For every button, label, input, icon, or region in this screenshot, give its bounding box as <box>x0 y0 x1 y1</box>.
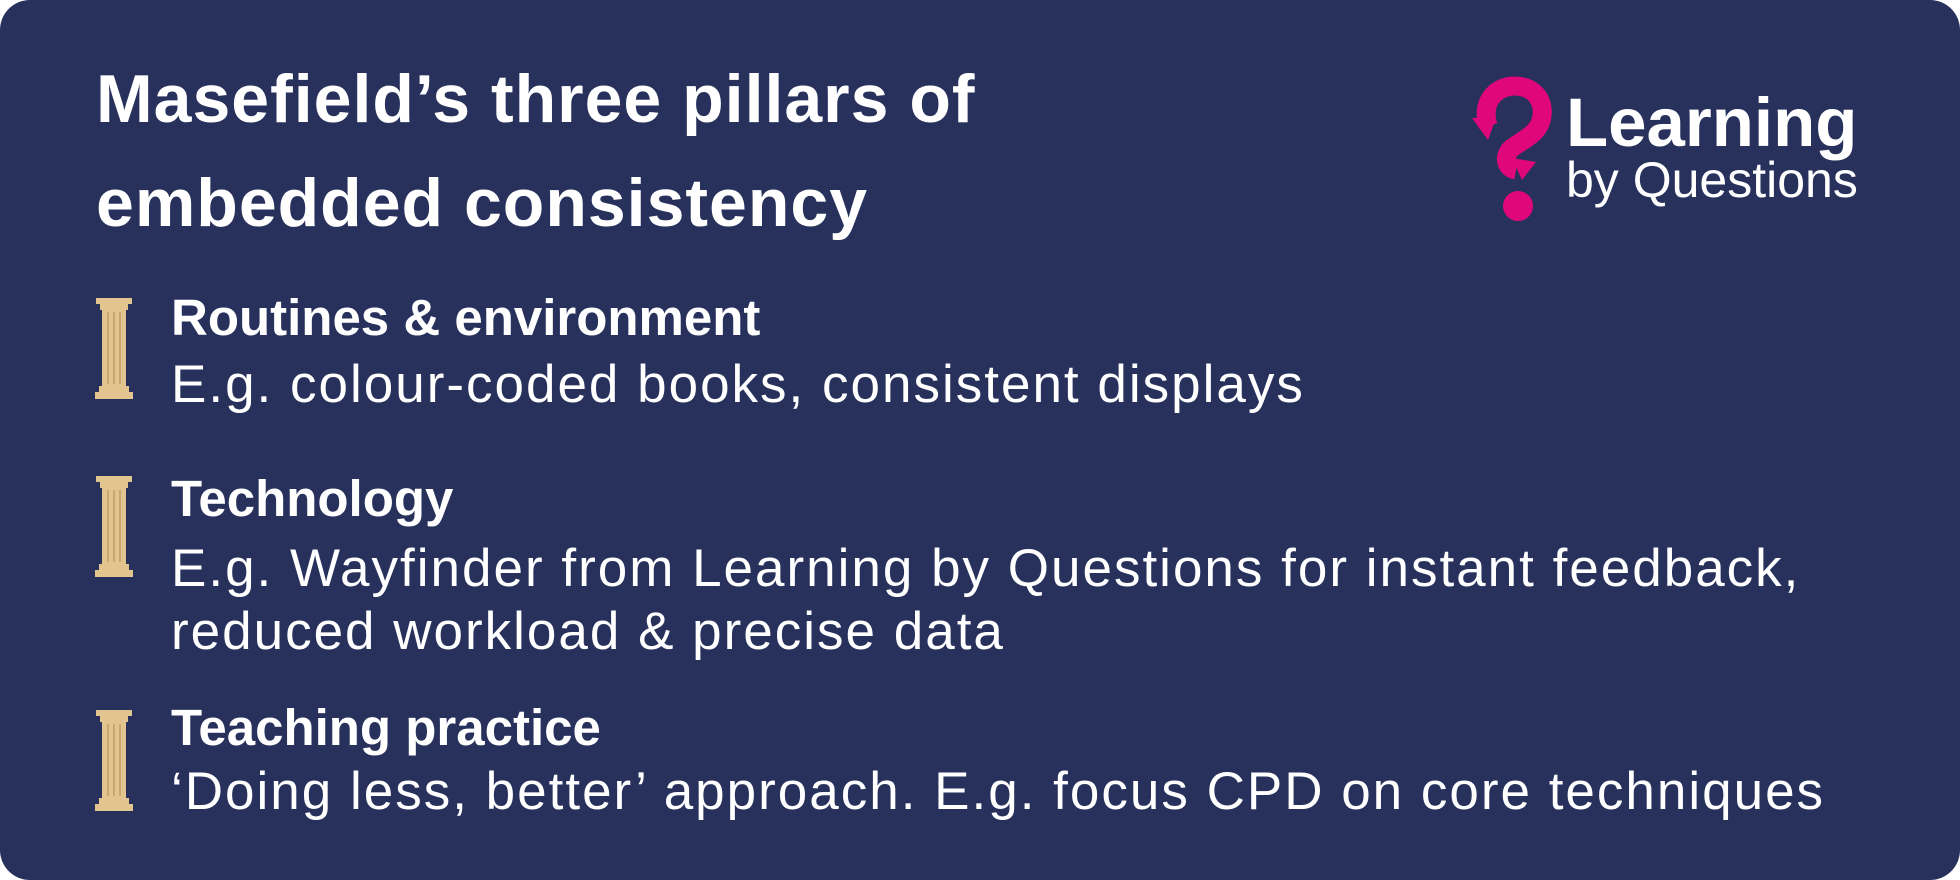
icon: pillar <box>95 298 133 399</box>
logo: by Questions <box>1566 152 1858 208</box>
pillar 1 <box>95 289 1305 414</box>
description: ‘Doing less, better’ approach. E.g. focus CPD on core techniques <box>171 762 1825 821</box>
icon: question mark <box>1472 76 1552 221</box>
heading: Teaching practice <box>171 699 601 756</box>
heading: Technology <box>171 470 453 527</box>
logo text: Learning <box>1566 84 1857 161</box>
icon: pillar <box>95 710 133 811</box>
pillar 2 <box>95 470 1800 661</box>
description <box>171 539 1800 661</box>
description: E.g. Wayfinder from Learning by Questions for instant feedback, <box>171 539 1800 598</box>
pillar 3 <box>95 699 1825 821</box>
logo <box>1472 76 1858 221</box>
description: E.g. colour-coded books, consistent displays <box>171 355 1305 414</box>
title <box>96 61 976 241</box>
heading: Routines & environment <box>171 289 760 346</box>
description: reduced workload & precise data <box>171 602 1005 661</box>
icon: pillar <box>95 476 133 577</box>
title: embedded consistency <box>96 165 868 241</box>
title: Masefield’s three pillars of <box>96 61 976 137</box>
